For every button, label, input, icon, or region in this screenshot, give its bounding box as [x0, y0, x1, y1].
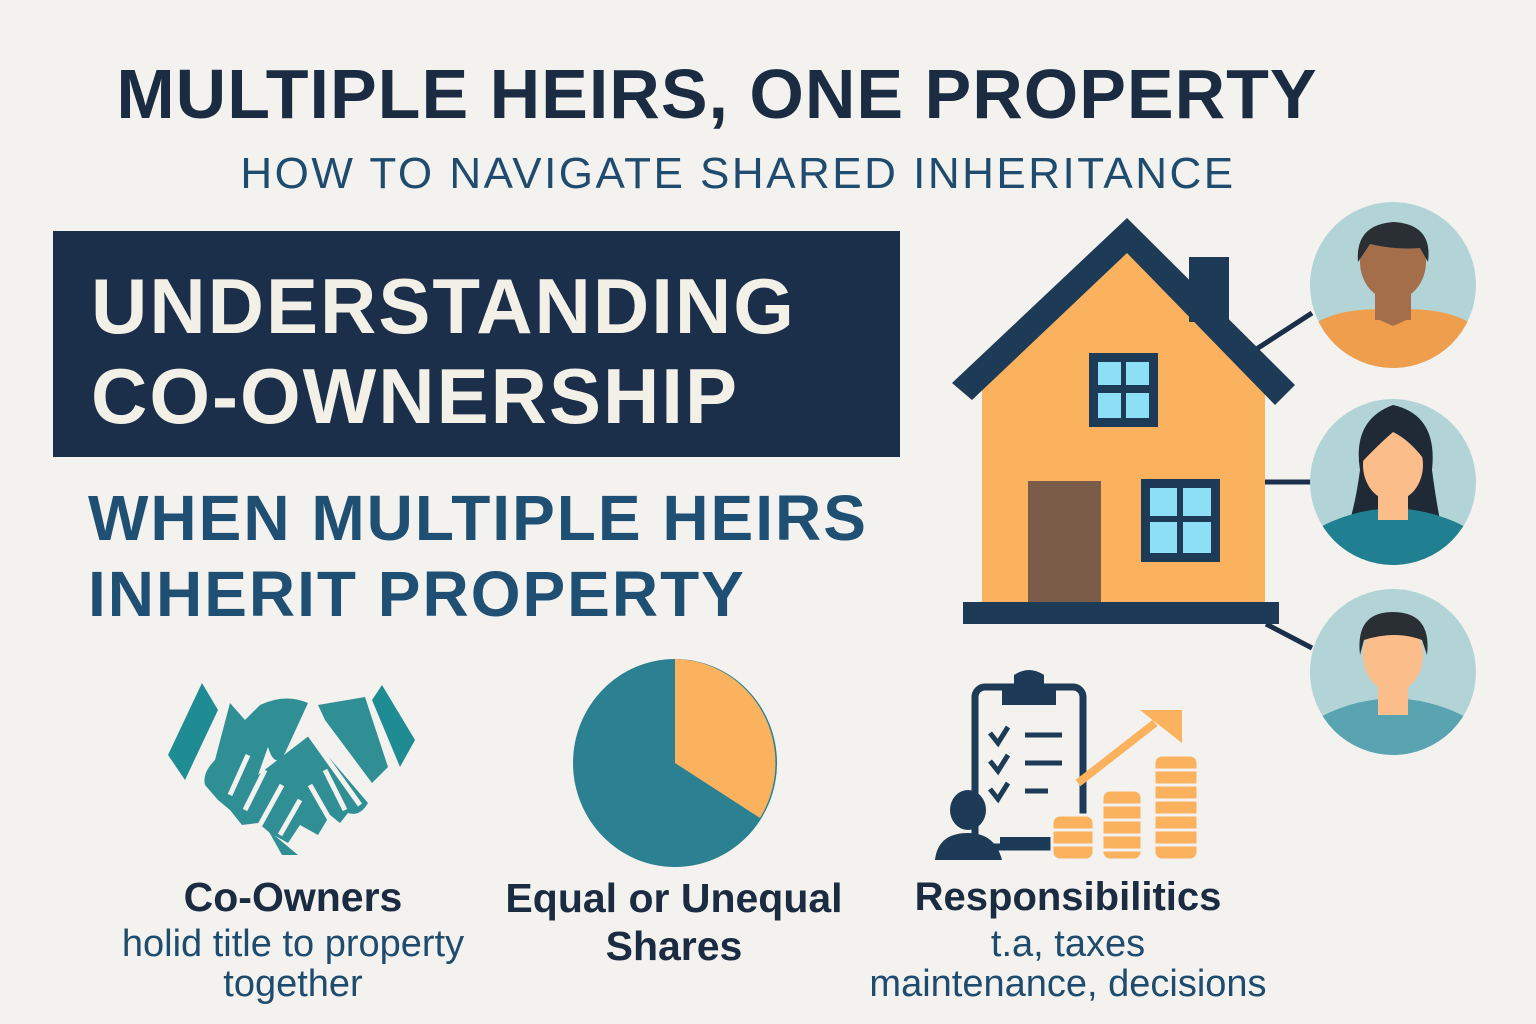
- banner: understanding co-ownership: CO-OWNERSHIP: [91, 352, 739, 440]
- icon: handshake: [168, 683, 415, 855]
- title: MULTIPLE HEIRS, ONE PROPERTY: [116, 55, 1318, 133]
- icon: responsibilities: [935, 670, 1196, 860]
- heading: when multiple heirs: [88, 482, 868, 630]
- house: [952, 218, 1295, 624]
- label: co-owners: holid title to property: [122, 923, 464, 965]
- label: responsibilities: t.a, taxes: [991, 923, 1145, 965]
- label: co-owners: [122, 874, 464, 1005]
- heir 1: [1310, 202, 1476, 368]
- heir 2: [1310, 399, 1476, 565]
- label: responsibilities: maintenance, decisions: [869, 963, 1267, 1005]
- banner: understanding co-ownership: UNDERSTANDING: [91, 262, 796, 350]
- label: responsibilities: [869, 875, 1267, 1005]
- label: co-owners: together: [223, 963, 363, 1005]
- subtitle: HOW TO NAVIGATE SHARED INHERITANCE: [240, 149, 1236, 198]
- heading: when multiple heirs: WHEN MULTIPLE HEIRS: [88, 482, 868, 554]
- heading: when multiple heirs: INHERIT PROPERTY: [88, 558, 746, 630]
- label: equal or unequal shares: [505, 875, 843, 969]
- label: equal or unequal shares: Equal or Unequal: [505, 875, 843, 921]
- illustration: house with heirs: [952, 202, 1476, 755]
- label: co-owners: Co-Owners: [184, 874, 402, 920]
- heir 3: [1310, 589, 1476, 755]
- label: responsibilities: Responsibilitics: [915, 875, 1221, 919]
- label: equal or unequal shares: Shares: [606, 923, 742, 969]
- chart: pie: [573, 659, 777, 867]
- connector lines: [1255, 313, 1312, 648]
- banner: understanding co-ownership: [53, 231, 900, 457]
